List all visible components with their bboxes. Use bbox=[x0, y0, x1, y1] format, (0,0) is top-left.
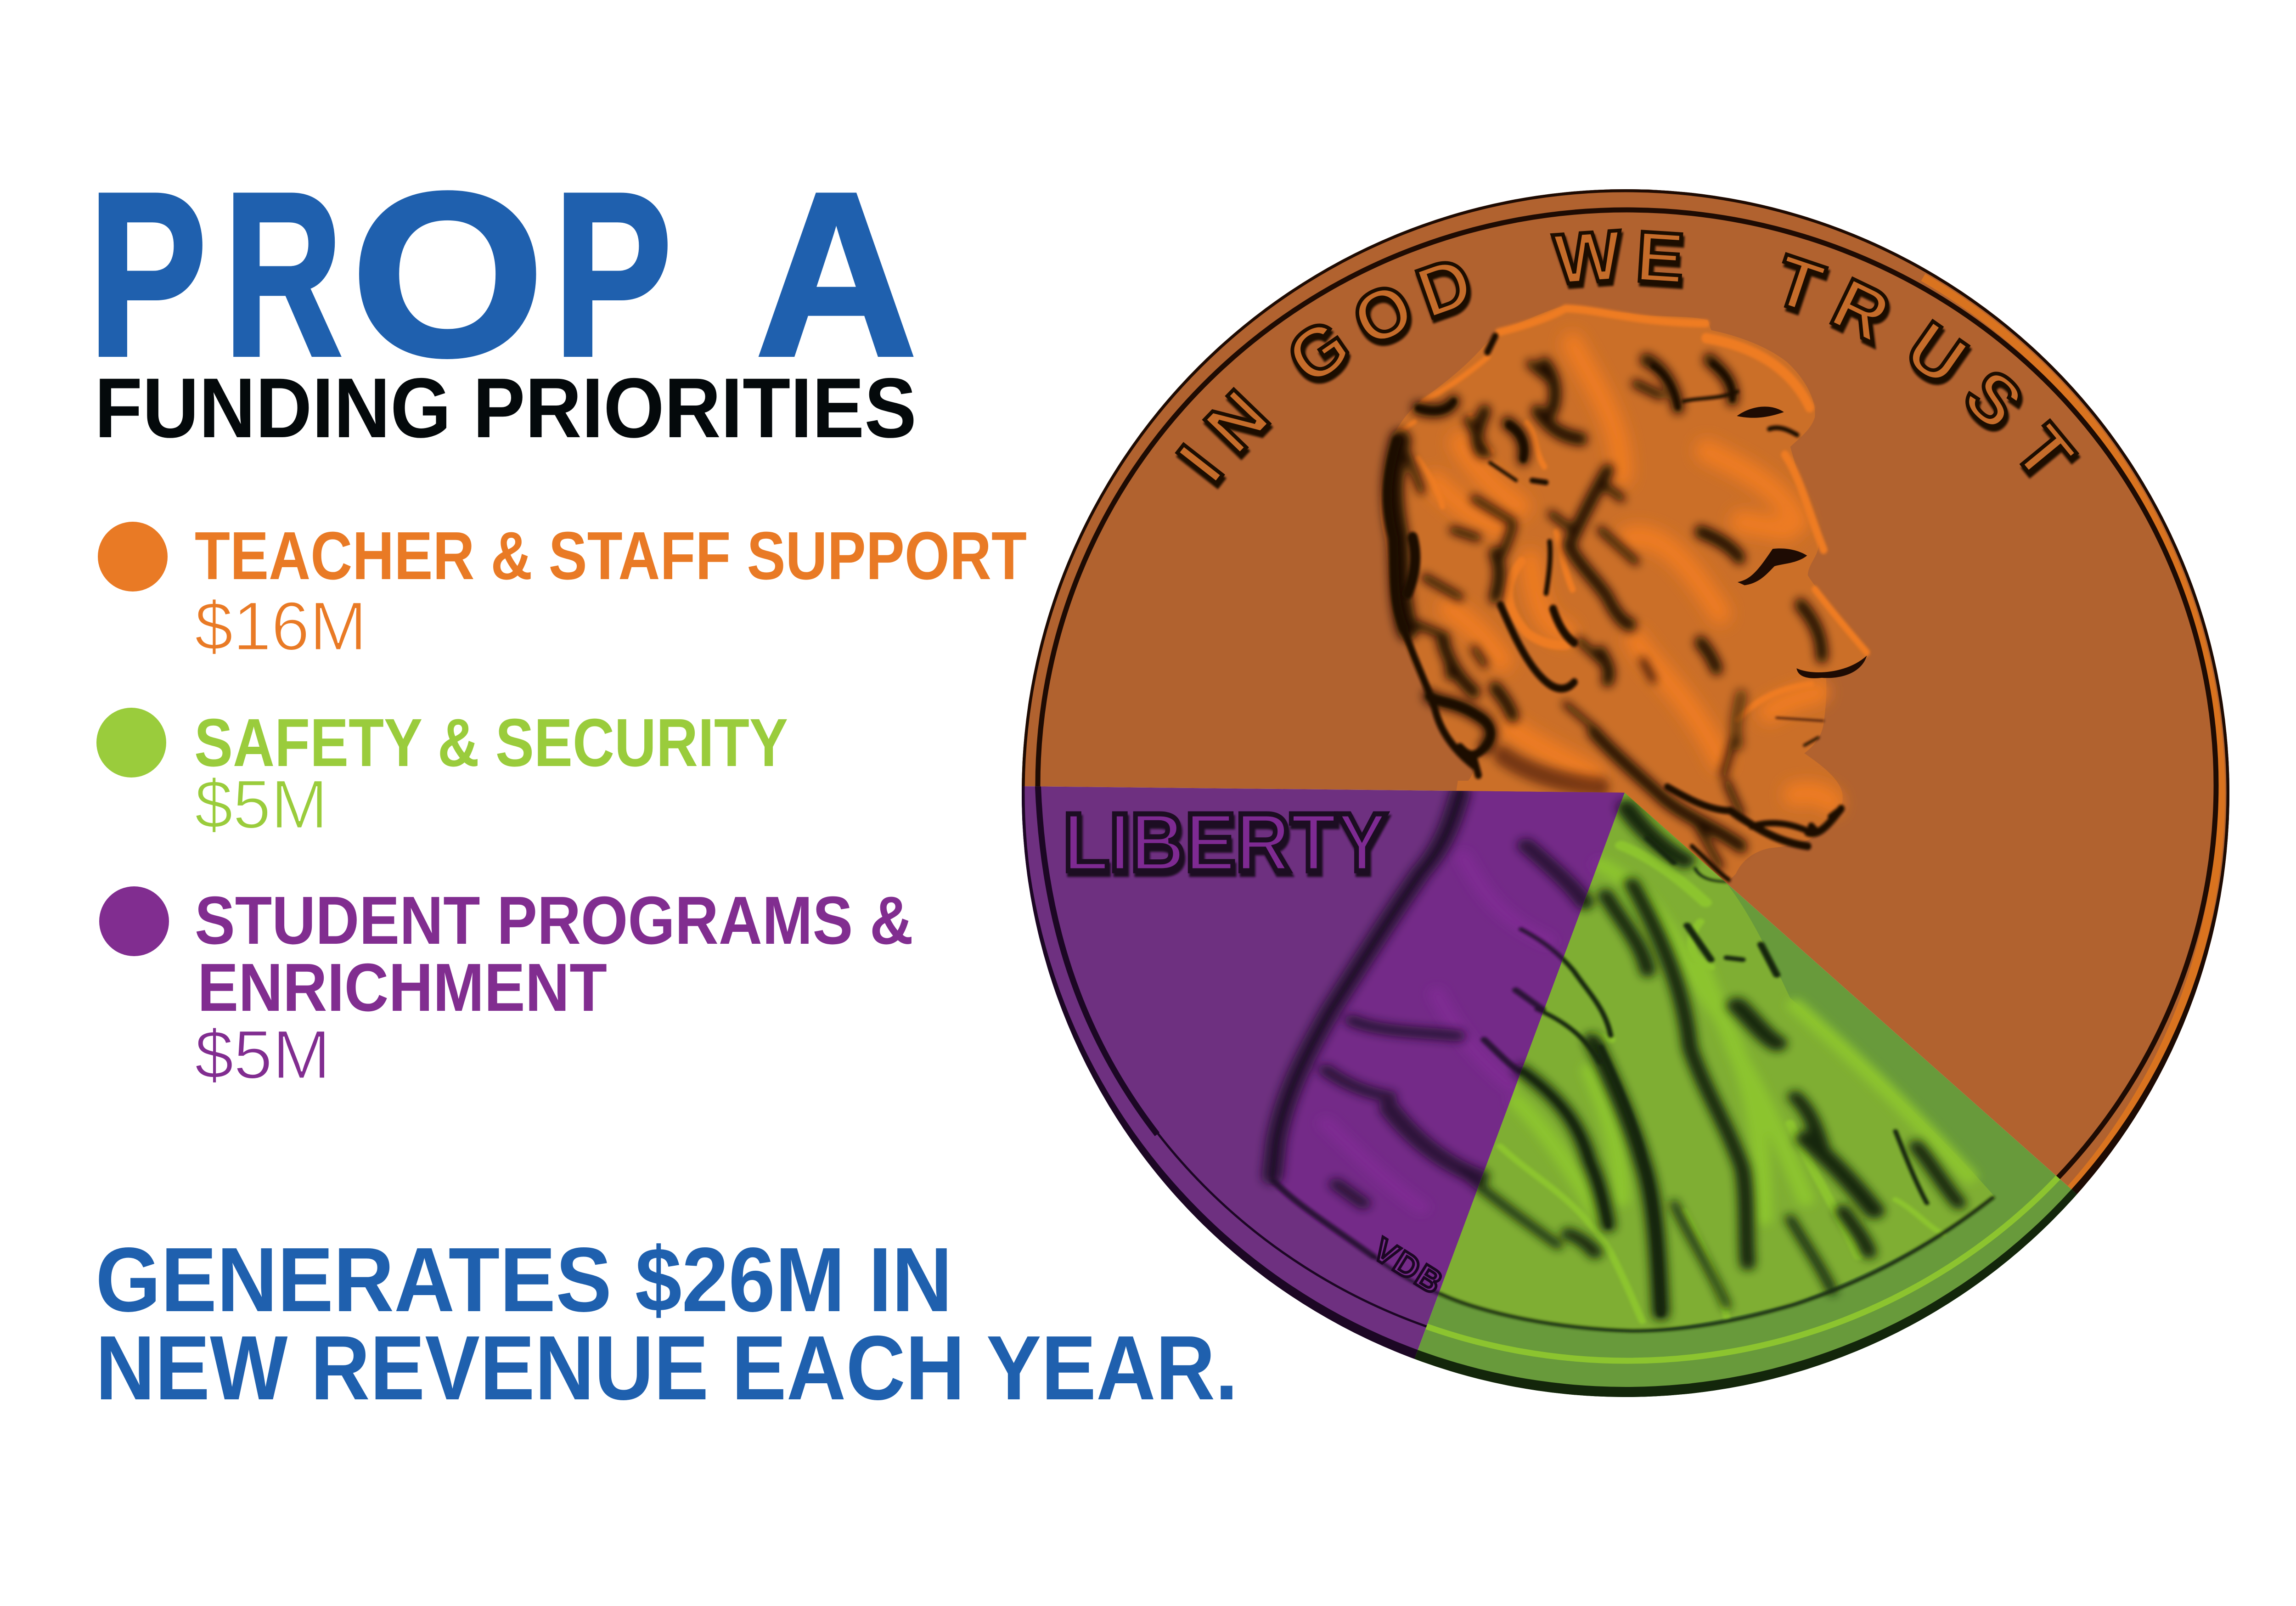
title: PROP A: R bbox=[224, 144, 343, 405]
legend item: teacher and staff support bbox=[98, 518, 1027, 665]
title: PROP A: A bbox=[755, 144, 917, 405]
pie slice: safety and security (green) bbox=[1022, 183, 2250, 1424]
legend item: student programs and enrichment bbox=[99, 883, 913, 1093]
callout: generates 26M in new revenue each year: NEW REVENUE EACH YEAR. bbox=[96, 1317, 1238, 1419]
coin inscription: in god we trust: IN GOD WE TRUST bbox=[1163, 215, 2089, 496]
title: PROP A: P bbox=[88, 144, 207, 405]
amount: 5M: $5M bbox=[195, 766, 328, 843]
label: student programs and enrichment: ENRICHMENT bbox=[197, 950, 607, 1026]
callout: generates 26M in new revenue each year: GENERATES $26M IN bbox=[96, 1229, 952, 1331]
icon: orange bullet bbox=[98, 522, 168, 592]
label: student programs and enrichment: STUDENT PROGRAMS & bbox=[195, 883, 913, 958]
title: PROP A: P bbox=[553, 144, 672, 405]
pie slice: teacher and staff support (orange) bbox=[1022, 189, 2229, 1194]
label: safety and security: SAFETY & SECURITY bbox=[194, 705, 788, 781]
chart: penny pie chart bbox=[1010, 183, 2250, 1424]
subtitle: funding priorities: FUNDING PRIORITIES bbox=[95, 361, 917, 456]
amount: 5M: $5M bbox=[195, 1016, 331, 1093]
pie slice: student programs and enrichment (purple) bbox=[1022, 786, 1625, 1359]
label: teacher and staff support: TEACHER & STAFF SUPPORT bbox=[195, 518, 1027, 594]
amount: 16M: $16M bbox=[195, 587, 367, 665]
coin inscription: liberty: LIBERTY bbox=[1063, 796, 1387, 889]
icon: purple bullet bbox=[99, 886, 169, 956]
icon: green bullet bbox=[96, 708, 166, 778]
coin inscription: designer initials: VDB bbox=[1367, 1231, 1449, 1301]
title: PROP A: O bbox=[351, 144, 545, 405]
legend item: safety and security bbox=[96, 705, 788, 843]
